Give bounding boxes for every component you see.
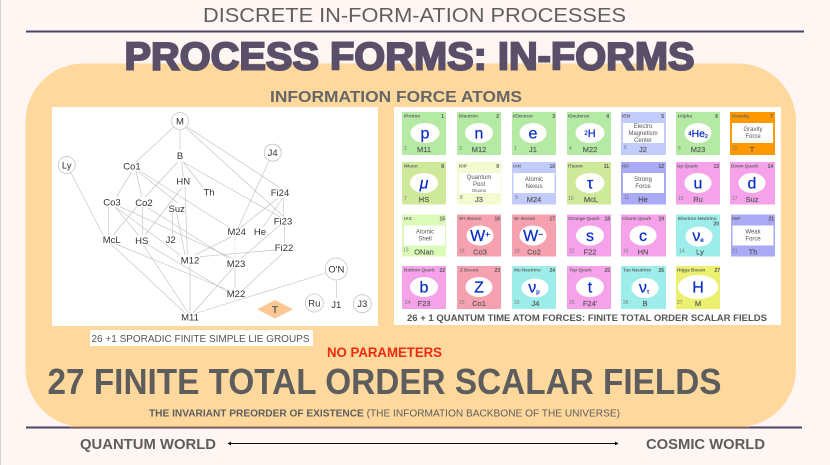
cell 27: 27 [677, 300, 683, 306]
cell 10: 9 [515, 195, 518, 201]
cell 26: τ [647, 290, 650, 296]
cell 19: 16 [623, 248, 629, 254]
cell 22: Bottom Quark [404, 268, 435, 272]
cell 21: 21 [732, 248, 738, 254]
lattice nodes: M23 [227, 259, 245, 270]
cell 18: Strange Quark [568, 216, 600, 221]
subheading: INFORMATION FORCE ATOMS [270, 89, 522, 106]
cell 24: ν [528, 280, 536, 296]
cell 2: 2 [496, 114, 499, 120]
cell 1: 1 [441, 114, 444, 120]
lattice nodes: J4 [268, 148, 278, 159]
cell 7: Gravity [743, 127, 763, 133]
cell 11: 11 [604, 164, 609, 170]
lattice nodes: Co2 [135, 198, 153, 209]
cell 11 [567, 162, 611, 204]
cell 6: He [692, 128, 705, 140]
cell 25: 25 [604, 268, 610, 274]
cell 8: IMuon [404, 164, 418, 168]
cell 12: ISF [622, 164, 629, 168]
cell 16: + [485, 230, 490, 239]
cell 23: Co1 [472, 299, 486, 308]
cell 14: 17 [732, 196, 738, 202]
cell 15: 13 [403, 248, 409, 254]
cell 25: Top Quark [569, 268, 592, 272]
lattice nodes: M24 [227, 227, 246, 238]
lattice nodes: M11 [181, 312, 199, 324]
orange background panel [26, 64, 796, 427]
table caption: 26 + 1 QUANTUM TIME ATOM FORCES: FINITE TOTAL ORDER SCALAR FIELDS [407, 313, 767, 324]
lattice nodes: Ly [62, 160, 72, 172]
cell 18: s [586, 228, 594, 245]
cell 15: IAS [404, 216, 412, 221]
cell 18: F22 [584, 248, 596, 256]
cell 20 [676, 214, 720, 256]
lattice nodes: He [254, 227, 266, 238]
cell 6: 6 [715, 114, 718, 120]
cell 25: F24' [583, 299, 598, 308]
cell 22: F23 [418, 299, 430, 308]
double arrow [228, 442, 618, 446]
cell 8: 7 [404, 196, 407, 202]
lattice nodes: B [177, 151, 183, 162]
lattice caption: 26 +1 SPORADIC FINITE SIMPLE LIE GROUPS [92, 333, 310, 345]
cell 3: J1 [529, 145, 537, 154]
cell 1: p [421, 126, 430, 142]
large statement: 27 FINITE TOTAL ORDER SCALAR FIELDS [48, 361, 722, 402]
cell 18: 22 [569, 248, 575, 254]
cell 19 [621, 214, 666, 256]
cell 23: Z [474, 280, 484, 296]
cell 1: 2 [404, 146, 407, 152]
cell 16: W+ Boson [459, 216, 482, 221]
cell 21 [731, 214, 775, 256]
cell 23: Z Boson [460, 268, 479, 272]
lattice nodes: M22 [227, 289, 245, 300]
lattice nodes: Co3 [103, 198, 121, 208]
cell 15: 15 [439, 216, 445, 222]
cell 22: 22 [439, 268, 445, 274]
cell 21: 21 [768, 216, 774, 222]
cell 1: M11 [417, 145, 431, 154]
cell 22: b [420, 280, 429, 296]
cell 26: Tau Neutrino [623, 268, 651, 272]
cell 13 [676, 162, 720, 204]
cell 9: IOP [459, 164, 467, 168]
cell 15: ONan [414, 248, 434, 256]
cell 9: 8 [460, 195, 463, 201]
cell 17: W- Boson [514, 216, 536, 221]
lattice nodes: Fi22 [275, 243, 293, 254]
lattice nodes: HN [176, 176, 190, 188]
cell 10: IAN [513, 164, 522, 168]
cell 27: 27 [714, 268, 720, 274]
lattice nodes: Fi23 [274, 216, 292, 228]
cell 24: J4 [532, 299, 539, 308]
cell 14: d [748, 176, 756, 192]
lattice nodes: J2 [166, 235, 176, 246]
cell 6 [676, 112, 720, 155]
cell 24: 24 [549, 268, 555, 274]
cell 19: c [639, 228, 647, 245]
cell 19: HN [638, 248, 648, 256]
cell 3: 1 [514, 146, 517, 152]
cell 22 [402, 266, 446, 309]
cell 11: ITauon [568, 164, 583, 168]
cell 26: B [642, 299, 648, 308]
cell 14: Down Quark [731, 164, 759, 168]
cell 5: Magnetism [628, 131, 658, 137]
cell 12: Strong [634, 177, 652, 183]
cell 17: Co2 [527, 248, 541, 256]
cell 27: Higgs Boson [677, 268, 706, 272]
lattice nodes: O'N [328, 264, 344, 276]
lattice nodes: HS [135, 236, 148, 247]
cell 2 [457, 112, 501, 155]
cell 5: Electro [634, 124, 653, 130]
cell 25: t [588, 280, 593, 296]
cell 7: 7 [770, 114, 773, 120]
cell 3: e [529, 126, 538, 142]
cell 16 [457, 214, 501, 256]
cell 11: McL [584, 195, 598, 204]
cell 10 [512, 162, 556, 204]
cell 6: 2 [705, 134, 708, 140]
cell 4: 4 [569, 146, 572, 152]
top heading: DISCRETE IN-FORM-ATION PROCESSES [203, 4, 626, 27]
cell 18 [567, 214, 611, 256]
cell 27: M [695, 299, 701, 308]
cell 6: 5 [678, 146, 681, 152]
cell 21: IWF [732, 216, 741, 221]
cell 13: 13 [713, 164, 719, 170]
cell 24 [512, 266, 556, 309]
cell 9: Gluons [472, 188, 487, 193]
cell 7: T [750, 145, 755, 154]
cell 14: Suz [746, 195, 759, 204]
cell 11: τ [587, 176, 594, 192]
cell 24: μ [536, 290, 540, 296]
cell 2: M12 [472, 145, 486, 154]
T diamond [257, 300, 293, 318]
cell 23 [457, 266, 501, 309]
lattice nodes: M12 [181, 256, 199, 266]
cell 2: INeutron [459, 114, 478, 118]
panel: quantum atom table [394, 107, 781, 325]
cell 6: M23 [691, 145, 705, 154]
cell 12 [621, 162, 666, 204]
cell 12: 12 [658, 164, 664, 170]
lattice nodes: M [176, 116, 184, 128]
cell 24: Mu Neutrino [514, 268, 541, 272]
cell 27: H [692, 280, 704, 296]
cell 20: e [700, 238, 704, 244]
invariant preorder line: THE INVARIANT PREORDER OF EXISTENCE (THE INFORMATION BACKBONE OF THE UNIVERSE) [149, 408, 620, 420]
no parameters label: NO PARAMETERS [327, 345, 442, 360]
cell 13: Ru [693, 195, 703, 204]
cell 13: u [694, 176, 702, 192]
cell 6: IAlpha [678, 114, 692, 118]
cell 5: J2 [639, 145, 647, 154]
cell 23: 23 [494, 268, 500, 274]
cell 5 [621, 112, 666, 155]
cell 4: IDeuteron [568, 114, 590, 118]
cell 20: Electron Neutrino [678, 216, 717, 221]
cell 3: IElectron [513, 114, 533, 118]
cell 26 [621, 266, 666, 309]
cell 16: 18 [459, 248, 465, 254]
cell 10: M24 [527, 195, 541, 204]
cell 4 [567, 112, 611, 155]
cell 9: Quantum [467, 175, 491, 181]
cell 12: He [638, 195, 648, 204]
cell 3: 3 [552, 114, 555, 120]
cell 3 [512, 112, 556, 155]
lattice edges [71, 125, 336, 313]
cell 1 [402, 112, 446, 155]
cell 4: H [588, 128, 596, 140]
cell 24: 20 [514, 300, 520, 306]
cell 1: IProton [404, 114, 420, 118]
cell 25: 25 [569, 300, 575, 306]
cell 10: 10 [549, 164, 555, 170]
cell 12: 11 [624, 195, 629, 201]
lattice nodes: McL [103, 235, 121, 246]
lattice nodes: J1 [331, 300, 341, 311]
cell 13: 15 [678, 196, 684, 202]
cell 26: 26 [658, 268, 664, 274]
lattice nodes: J3 [357, 299, 367, 310]
cell 21: Th [749, 248, 757, 256]
lattice nodes: Ru [308, 298, 320, 310]
lattice nodes: Suz [169, 204, 185, 215]
cell 26: 26 [623, 300, 629, 306]
cell 20: Ly [696, 248, 704, 256]
cell 21: Weak [745, 230, 762, 236]
cell 17: W [523, 228, 538, 245]
cell 7 [730, 112, 775, 155]
cell 19: Charm Quark [622, 216, 652, 221]
cosmic world label: COSMIC WORLD [646, 437, 765, 453]
cell 11: 10 [568, 196, 574, 202]
lattice nodes: Fi24 [271, 188, 289, 199]
cell 26: ν [639, 280, 647, 296]
cell 2: 3 [459, 146, 462, 152]
T diamond: T [272, 305, 278, 316]
cell 5: 5 [661, 114, 664, 120]
cell 20: 20 [713, 222, 719, 228]
cell 5: IEM [622, 114, 630, 118]
cell 4: 4 [606, 114, 609, 120]
cell 6: 4 [688, 132, 692, 138]
lattice nodes: Th [203, 188, 215, 198]
cell 12: Force [635, 184, 651, 190]
cell 14 [730, 162, 775, 204]
cell 9: J3 [475, 195, 483, 204]
cell 16: Co3 [473, 248, 487, 256]
cell 15 [402, 214, 446, 256]
cell 13: Up Quark [677, 164, 698, 168]
cell 9: Pool [473, 182, 485, 188]
cell 15: Atomic [416, 230, 434, 236]
cell 8 [402, 162, 446, 204]
lattice nodes: Co1 [123, 162, 141, 172]
cell 20: ν [692, 228, 700, 245]
cell 7: Force [745, 134, 761, 140]
cell 18: 18 [604, 216, 610, 222]
cell 5: 6 [624, 145, 627, 151]
cell 4: 2 [584, 131, 588, 137]
cell 27 [676, 266, 720, 309]
cell 8: μ [419, 176, 429, 192]
cell 21: Force [745, 236, 761, 242]
cell 7: 12 [732, 146, 738, 152]
cell 9 [457, 162, 501, 204]
cell 7: IGravity [732, 114, 750, 118]
cell 25 [567, 266, 611, 309]
cell 4: M22 [583, 145, 597, 154]
cell 15: Shell [418, 236, 432, 242]
quantum world label: QUANTUM WORLD [80, 437, 216, 453]
cell 8: 8 [441, 164, 444, 170]
cell 14: 14 [767, 164, 773, 170]
cell 2: n [475, 126, 483, 142]
lattice nodes [58, 112, 371, 324]
cell 16: W [470, 228, 485, 245]
cell 20: 14 [679, 248, 685, 254]
cell 16: 16 [494, 216, 500, 222]
cell 8: HS [419, 195, 429, 204]
cell 19: 19 [658, 216, 664, 222]
cell 10: Nexus [525, 184, 543, 190]
cell 9: 9 [496, 164, 499, 170]
cell 22: 24 [405, 300, 411, 306]
cell 17: 19 [514, 248, 520, 254]
cell 17 [512, 214, 556, 256]
cell 23: 23 [459, 300, 465, 306]
cell 5: Center [634, 138, 652, 144]
panel: sporadic group lattice [52, 107, 378, 326]
cell 17: 17 [549, 216, 555, 222]
main title: PROCESS FORMS: IN-FORMS [124, 36, 694, 78]
cell 10: Atomic [525, 177, 543, 183]
cell 17: − [538, 230, 543, 239]
